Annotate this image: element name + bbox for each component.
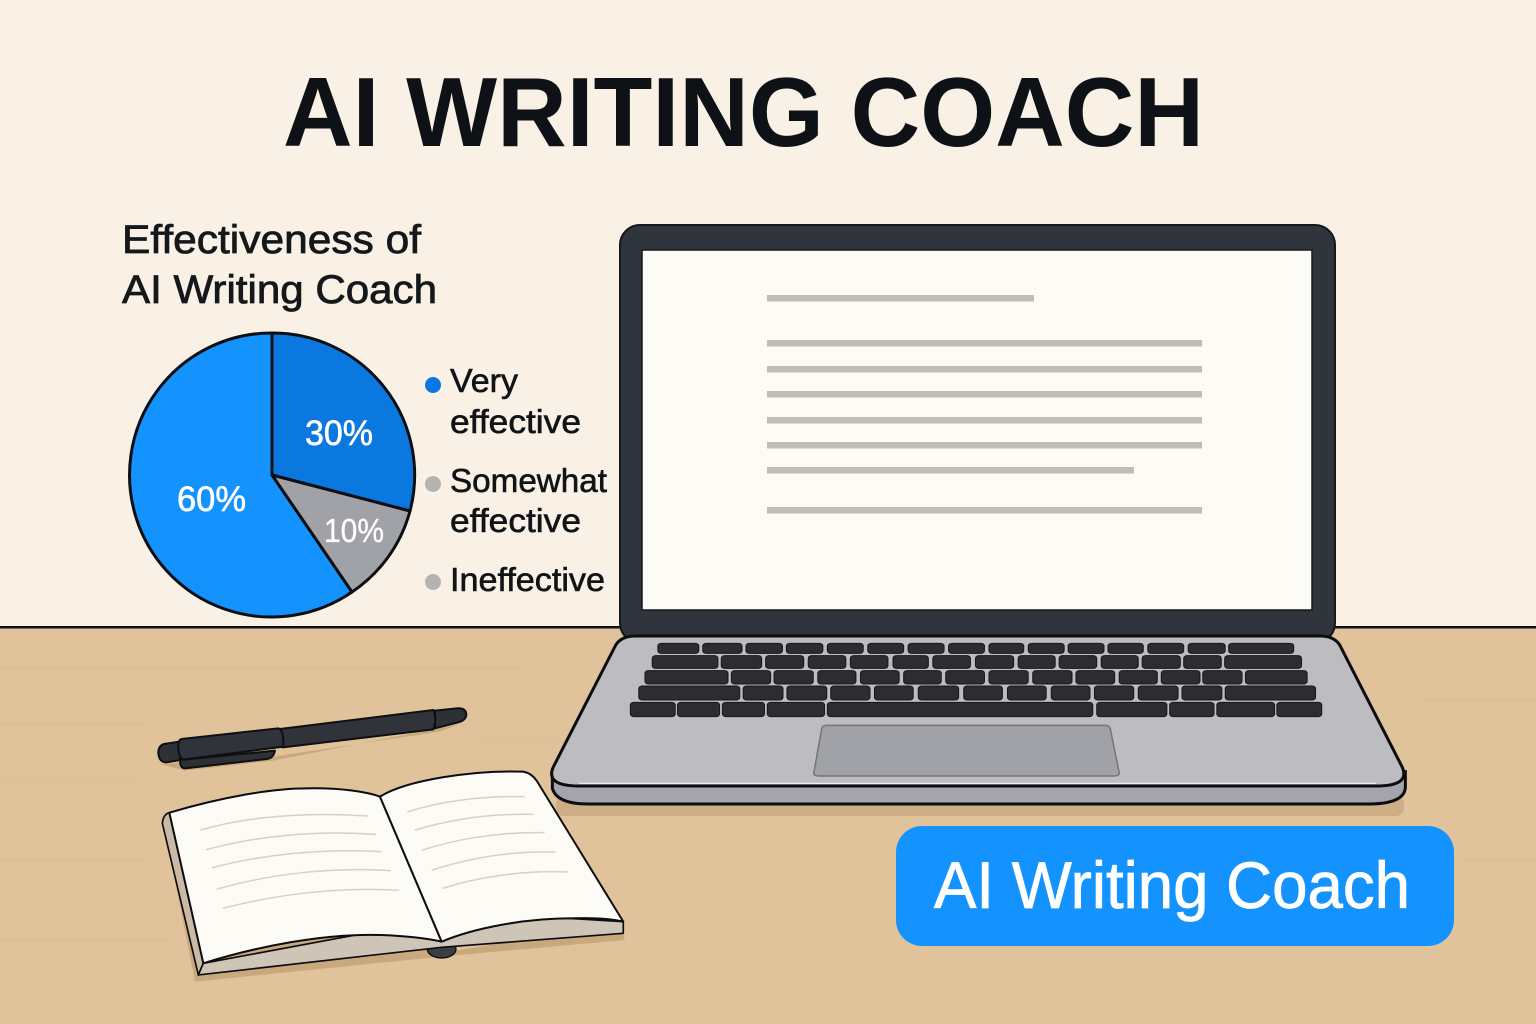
document text lines (767, 295, 1202, 514)
keyboard (630, 643, 1322, 717)
legend (425, 362, 607, 598)
pen (158, 708, 466, 771)
legend item: ineffective: Ineffective (450, 561, 605, 598)
spine bump (427, 941, 456, 958)
chart heading (122, 218, 437, 312)
value label 10%: 10% (324, 512, 384, 549)
page stack bottom (198, 917, 623, 975)
open notebook (162, 771, 625, 982)
background wall (0, 0, 1536, 628)
pen grip (178, 728, 283, 759)
legend item: very effective (425, 362, 581, 440)
laptop shadow (556, 796, 1404, 816)
slice: 30% (272, 333, 415, 511)
chart heading: Effectiveness of (122, 218, 422, 262)
pen shadow (160, 724, 460, 771)
left page edge (162, 813, 203, 975)
slice: 10% (272, 475, 410, 592)
value label 30%: 30% (305, 414, 373, 453)
page text lines (201, 797, 567, 908)
notebook shadow (165, 830, 625, 982)
base lower edge (552, 772, 1405, 804)
legend item: very effective: Very (450, 362, 518, 399)
button: AI Writing Coach (896, 826, 1454, 946)
laptop base (552, 636, 1405, 804)
desk surface (0, 626, 1536, 1024)
laptop screen lid (620, 225, 1335, 643)
legend item: somewhat effective (425, 462, 607, 539)
left page (169, 788, 442, 963)
pie chart (130, 333, 415, 617)
legend item: very effective: effective (450, 403, 581, 440)
laptop display (642, 250, 1312, 610)
slice: 60% (130, 333, 352, 617)
button: AI Writing Coach: AI Writing Coach (934, 848, 1410, 922)
base deck (552, 636, 1404, 786)
pen end cap (158, 742, 180, 762)
deck highlight (579, 782, 1376, 784)
pen tip (435, 708, 466, 728)
chart heading: AI Writing Coach (122, 268, 437, 312)
trackpad (814, 725, 1119, 776)
value label 60%: 60% (177, 480, 246, 519)
legend item: somewhat effective: Somewhat (450, 462, 607, 499)
pen clip (180, 751, 275, 768)
laptop (552, 225, 1405, 816)
legend item: somewhat effective: effective (450, 502, 581, 539)
right page (380, 771, 623, 942)
pen barrel (280, 710, 435, 747)
title: AI WRITING COACH (283, 57, 1204, 167)
